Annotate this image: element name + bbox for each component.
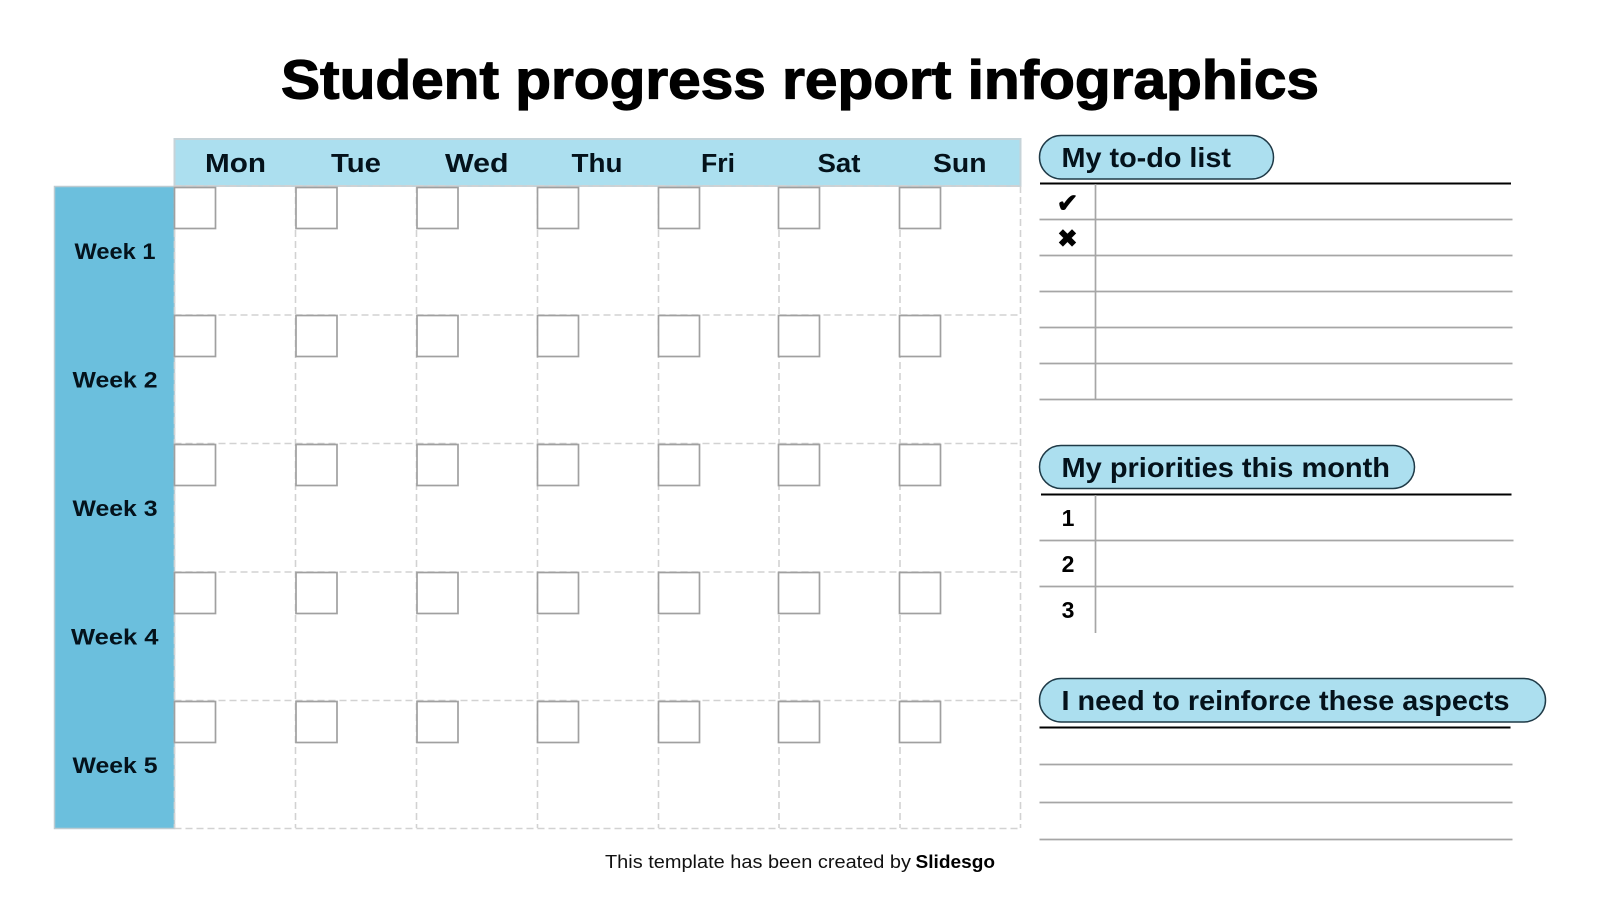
heading pill: my to-do list — [1040, 136, 1274, 179]
footer credit: This template has been created by — [605, 852, 911, 872]
header band: days of week: Fri — [701, 150, 735, 178]
number 2: 2 — [1062, 551, 1074, 577]
header band: days of week: Tue — [331, 150, 381, 178]
week column: Week 3 — [72, 496, 158, 521]
title: Student progress report infographics — [281, 48, 1319, 110]
header band: days of week: Thu — [572, 150, 622, 178]
week column: Week 4 — [71, 624, 159, 650]
icon: cross mark: ✖ — [1057, 224, 1078, 253]
header band: days of week — [174, 139, 1020, 186]
panel: to-do list — [1040, 136, 1512, 400]
header band: days of week: Mon — [205, 150, 266, 178]
week column: Week 1 — [74, 239, 156, 264]
panel: weekly calendar — [54, 139, 1020, 828]
heading pill: my priorities this month — [1040, 446, 1414, 488]
footer credit: Slidesgo — [916, 852, 995, 872]
header band: days of week: Sat — [818, 150, 861, 178]
priorities table lines — [1040, 494, 1514, 633]
writing lines — [1040, 728, 1512, 840]
week column: Week 2 — [72, 368, 158, 392]
number 1: 1 — [1062, 505, 1075, 531]
panel: reinforce aspects — [1040, 678, 1546, 840]
heading pill: i need to reinforce these aspects — [1040, 678, 1546, 722]
to-do table lines — [1040, 184, 1512, 400]
icon: check mark: ✔ — [1057, 189, 1078, 219]
panel: priorities — [1040, 446, 1514, 633]
week column — [54, 186, 174, 828]
dashed grid — [174, 186, 1020, 828]
week column: Week 5 — [72, 753, 158, 778]
heading pill: my priorities this month: My priorities this month — [1062, 452, 1390, 483]
header band: days of week: Wed — [445, 150, 508, 178]
heading pill: my to-do list: My to-do list — [1062, 142, 1231, 173]
heading pill: i need to reinforce these aspects: I need to reinforce these aspects — [1062, 685, 1510, 716]
number 3: 3 — [1062, 597, 1074, 623]
header band: days of week: Sun — [933, 150, 986, 178]
checkboxes — [174, 188, 940, 742]
